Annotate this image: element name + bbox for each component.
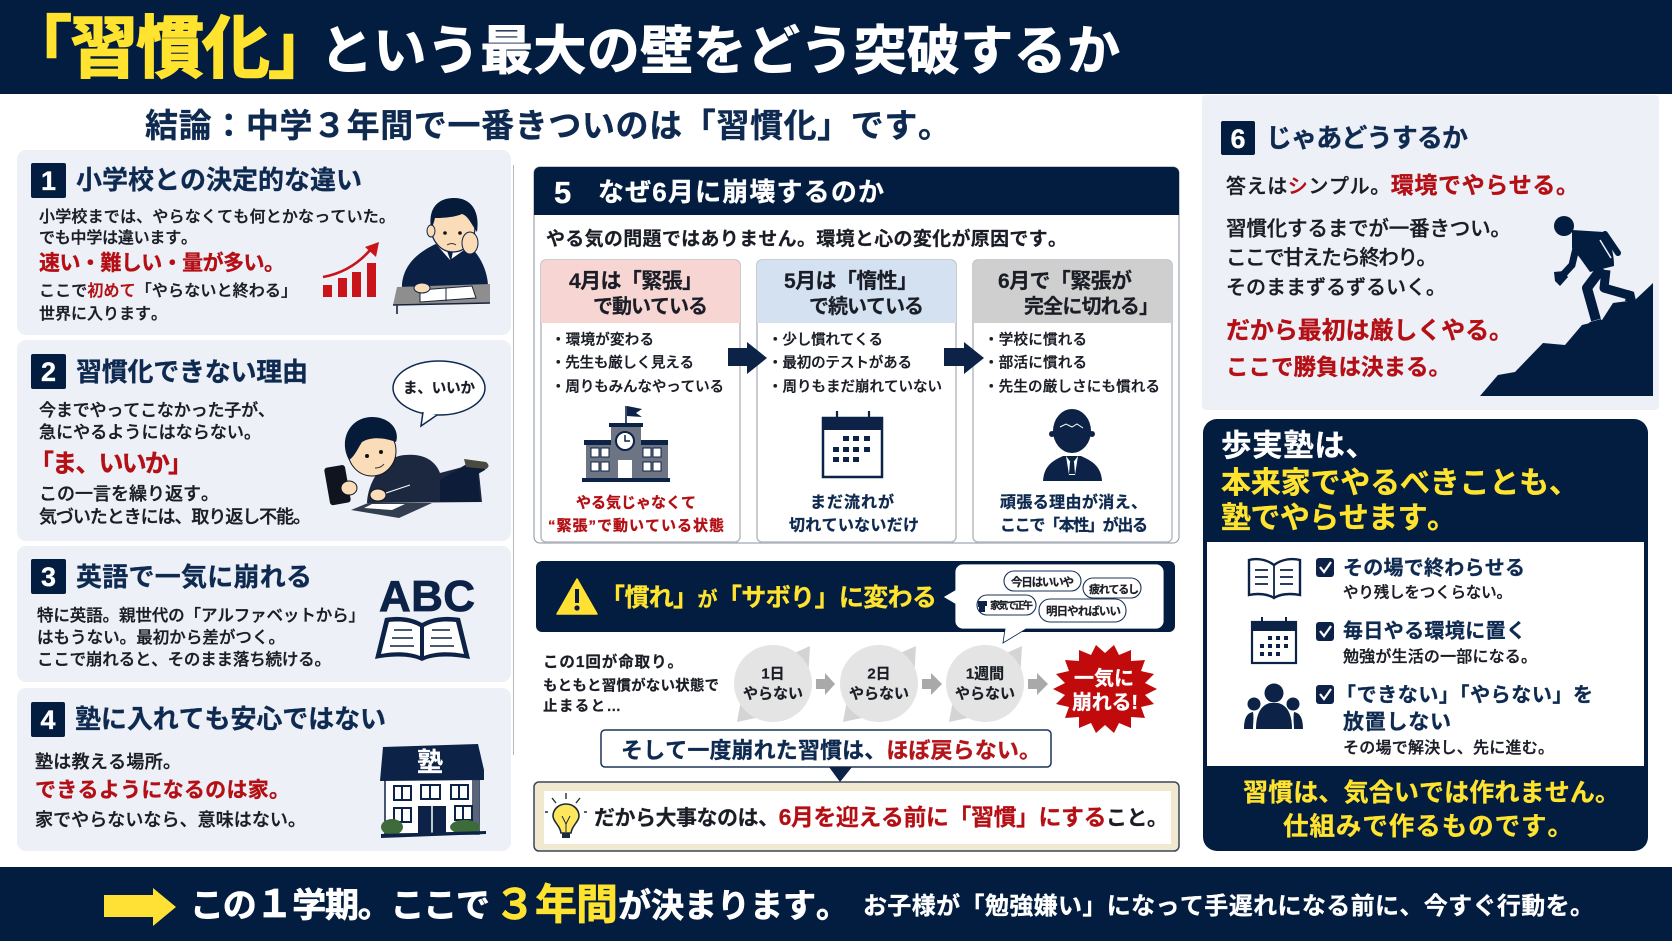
text block 6: 習慣化するまでが一番きつい。 xyxy=(1226,218,1511,240)
burst: collapse at once: 崩れる! xyxy=(1072,691,1138,714)
column: June switch off: 頑張る理由が消え、 xyxy=(1000,492,1147,512)
icon: juku building: 塾 xyxy=(417,747,443,777)
column: April tension xyxy=(541,260,740,542)
checkbox xyxy=(1316,622,1334,641)
row: don't leave unresolved: その場で解決し、先に進む。 xyxy=(1343,739,1554,757)
solution headline xyxy=(1221,429,1579,535)
row: finish on the spot: やり残しをつくらない。 xyxy=(1343,582,1512,602)
burst: collapse at once: 一気に xyxy=(1074,667,1134,690)
badge 3 xyxy=(31,559,66,594)
step: 1 week: やらない xyxy=(955,686,1015,702)
burst: collapse at once xyxy=(1053,645,1157,733)
icon: warning triangle xyxy=(557,579,597,614)
text block 1: 世界に入ります。 xyxy=(39,305,167,323)
closing message: 仕組みで作るものです。 xyxy=(1283,813,1573,841)
text: this one time is fatal: 止まると… xyxy=(543,698,621,715)
heading 4: 塾に入れても安心ではない xyxy=(75,704,386,734)
callout: once broken hardly returns xyxy=(601,730,1051,767)
footer banner xyxy=(0,867,1672,941)
title banner: という最大の壁をどう突破するか xyxy=(320,22,1120,81)
column: June switch off: ・先生の厳しさにも慣れる xyxy=(984,378,1160,396)
badge 4 xyxy=(31,702,65,737)
speech bubble: ma iika: ま、いいか xyxy=(403,380,476,397)
callout: make it a habit before June: だから大事なのは、6月を迎える前に「習慣」にすること。 xyxy=(594,804,1168,830)
arrow: May to June xyxy=(944,342,984,374)
panel 5 lead text: やる気の問題ではありません。環境と心の変化が原因です。 xyxy=(546,227,1067,250)
text: this one time is fatal xyxy=(543,652,719,715)
column: May inertia: ・最初のテストがある xyxy=(768,354,912,372)
checkbox xyxy=(1316,685,1334,704)
badge 6: 6 xyxy=(1230,124,1246,154)
badge 3: 3 xyxy=(41,562,56,592)
row: daily environment: 毎日やる環境に置く xyxy=(1343,620,1526,642)
column: May inertia: 5月は「惰性」 xyxy=(784,269,918,293)
solution headline: 本来家でやるべきことも、 xyxy=(1221,467,1579,500)
text block 2: 気づいたときには、取り返し不能。 xyxy=(39,507,311,527)
text block 6: ここで甘えたら終わり。 xyxy=(1226,246,1437,270)
thought bubble: excuses: 疲れてるし xyxy=(1089,582,1139,596)
text: this one time is fatal: この1回が命取り。 xyxy=(543,652,683,671)
row: daily environment: 勉強が生活の一部になる。 xyxy=(1343,647,1537,666)
column: April tension: ・環境が変わる xyxy=(551,330,654,348)
text block 6: だから最初は厳しくやる。 xyxy=(1226,318,1513,344)
illustration: climber on mountain xyxy=(1480,216,1653,396)
step: 2 days: やらない xyxy=(849,686,909,702)
row: finish on the spot: その場で終わらせる xyxy=(1343,556,1525,580)
row: don't leave unresolved: 放置しない xyxy=(1343,711,1451,734)
thought bubble: excuses: 家気で正午 xyxy=(990,599,1033,612)
column: June switch off: 6月で「緊張が xyxy=(998,269,1132,293)
icon: school xyxy=(582,406,670,482)
text block 1 xyxy=(39,208,395,323)
icon: book xyxy=(1249,559,1300,598)
text block 1: 小学校までは、やらなくても何とかなっていた。 xyxy=(39,208,395,226)
solution headline: 歩実塾は、 xyxy=(1221,429,1376,463)
text block 2: 「ま、いいか」 xyxy=(29,450,193,478)
title banner xyxy=(0,0,1672,94)
thought bubble: excuses: 今日はいいや xyxy=(1011,575,1074,589)
text block 3: ここで崩れると、そのまま落ち続ける。 xyxy=(37,650,331,669)
column: April tension: ・先生も厳しく見える xyxy=(551,354,694,372)
arrow xyxy=(1028,673,1048,695)
column: April tension: やる気じゃなくて xyxy=(576,494,696,512)
text block 2: この一言を繰り返す。 xyxy=(39,484,219,504)
heading 1: 小学校との決定的な違い xyxy=(76,165,362,195)
text block 4 xyxy=(35,752,306,830)
heading 3: 英語で一気に崩れる xyxy=(76,562,312,592)
warning band: familiarity becomes slacking xyxy=(536,561,1175,643)
panel 1: difference from elementary school xyxy=(17,150,511,335)
closing message xyxy=(1243,779,1620,841)
arrow xyxy=(816,673,835,695)
badge 2: 2 xyxy=(41,357,56,387)
icon: ABC open book xyxy=(375,572,475,661)
column: April tension: “緊張”で動いている状態 xyxy=(548,516,724,534)
badge 6 xyxy=(1221,121,1255,155)
icon: juku building xyxy=(380,744,486,838)
text block 1: ここで初めて「やらないと終わる」 xyxy=(39,282,297,300)
arrow: yellow xyxy=(104,888,176,926)
text block 4: 家でやらないなら、意味はない。 xyxy=(35,810,306,830)
text block 2: 急にやるようにはならない。 xyxy=(39,423,261,442)
text block 1: でも中学は違います。 xyxy=(39,229,197,247)
step: 2 days xyxy=(840,645,918,722)
panel 4: juku not enough xyxy=(17,688,511,851)
footer main message: この１学期。ここで xyxy=(190,884,490,926)
step: 1 day: 1日 xyxy=(761,666,785,682)
text block 2 xyxy=(29,400,311,527)
column: April tension: 4月は「緊張」 xyxy=(569,270,703,293)
text: this one time is fatal: もともと習慣がない状態で xyxy=(543,676,719,694)
checkbox xyxy=(1316,558,1334,577)
column: April tension: ・周りもみんなやっている xyxy=(551,378,724,396)
conclusion heading: 結論：中学３年間で一番きついのは「習慣化」です。 xyxy=(145,107,951,144)
text block 3: 特に英語。親世代の「アルファベットから」 xyxy=(37,606,365,625)
step: 1 day xyxy=(734,645,812,722)
footer banner: が決まります。 xyxy=(618,887,849,924)
column: June switch off: ・学校に慣れる xyxy=(984,330,1087,348)
text block 6: ここで勝負は決まる。 xyxy=(1226,355,1451,380)
icon: calendar small xyxy=(1252,617,1296,663)
panel 5 header xyxy=(534,167,1179,215)
solution headline: 塾でやらせます。 xyxy=(1221,502,1457,535)
column: May inertia xyxy=(757,260,956,542)
text block 6: そのままずるずるいく。 xyxy=(1226,276,1446,299)
column: May inertia: 切れていないだけ xyxy=(789,516,919,534)
icon: rising bar chart xyxy=(323,242,379,297)
heading 6: じゃあどうするか xyxy=(1266,123,1468,153)
icon: person silhouette xyxy=(1043,409,1102,481)
panel 5: why collapse in June xyxy=(534,167,1179,543)
title banner: 「習慣化」 xyxy=(4,11,336,87)
step: 1 week xyxy=(946,645,1024,722)
panel 3: English collapse xyxy=(17,546,511,682)
panel 6: what to do xyxy=(1202,95,1659,410)
column: May inertia: まだ流れが xyxy=(810,492,894,512)
icon: ABC open book: ABC xyxy=(379,572,475,621)
arrow: down triangle xyxy=(829,767,852,782)
badge 2 xyxy=(31,354,66,389)
column: June switch off: ・部活に慣れる xyxy=(984,354,1087,372)
badge 1 xyxy=(31,163,66,198)
panel 5 header: なぜ6月に崩壊するのか xyxy=(598,177,884,207)
arrow: April to May xyxy=(728,342,767,374)
panel 2: why habit fails xyxy=(17,340,511,541)
icon: calendar xyxy=(823,411,882,477)
callout: make it a habit before June xyxy=(534,782,1179,851)
closing message: 習慣は、気合いでは作れません。 xyxy=(1243,779,1620,807)
column: June switch off: ここで「本性」が出る xyxy=(1000,516,1148,534)
warning band: familiarity becomes slacking: 「慣れ」が「サボり」に変わる xyxy=(600,584,937,612)
footer sub message: お子様が「勉強嫌い」になって手遅れになる前に、今すぐ行動を。 xyxy=(863,892,1594,920)
step: 1 week: 1週間 xyxy=(966,666,1004,682)
step: 2 days: 2日 xyxy=(867,666,891,682)
panel: Ayumi juku solution xyxy=(1203,419,1648,851)
callout: once broken hardly returns: そして一度崩れた習慣は、ほぼ戻らない。 xyxy=(621,738,1041,763)
panel 5 header: 5 xyxy=(554,175,571,210)
text block 6: 答えはシンプル。環境でやらせる。 xyxy=(1226,172,1579,198)
flow: days of not doing xyxy=(734,645,1157,733)
icon: light bulb xyxy=(545,793,587,838)
text block 4: 塾は教える場所。 xyxy=(35,752,181,772)
text block 3: はもうない。最初から差がつく。 xyxy=(37,627,285,647)
badge 4: 4 xyxy=(40,705,56,735)
badge 1: 1 xyxy=(41,166,56,196)
row: don't leave unresolved xyxy=(1244,684,1593,757)
column: June switch off xyxy=(973,260,1172,542)
heading 2: 習慣化できない理由 xyxy=(76,357,308,387)
row: don't leave unresolved: 「できない」「やらない」を xyxy=(1336,684,1593,706)
row: daily environment xyxy=(1252,617,1537,666)
text block 2: 今までやってこなかった子が、 xyxy=(39,400,275,420)
text block 4: できるようになるのは家。 xyxy=(35,779,290,802)
thought bubble: excuses xyxy=(943,564,1164,643)
column: June switch off: 完全に切れる」 xyxy=(1024,295,1159,318)
illustration: student studying xyxy=(393,198,490,314)
thought bubble: excuses: 明日やればいい xyxy=(1046,604,1121,618)
column: May inertia: ・少し慣れてくる xyxy=(768,330,883,348)
text block 3 xyxy=(37,606,365,669)
white checklist area xyxy=(1207,542,1644,766)
column: May inertia: で続いている xyxy=(809,295,924,318)
illustration: student lying with phone xyxy=(324,417,488,518)
speech bubble: ma iika xyxy=(393,361,485,426)
footer banner: ３年間 xyxy=(494,881,618,928)
step: 1 day: やらない xyxy=(743,686,803,702)
arrow xyxy=(922,673,942,695)
column: April tension: で動いている xyxy=(593,295,708,318)
text block 6 xyxy=(1226,172,1579,380)
column: May inertia: ・周りもまだ崩れていない xyxy=(768,378,942,396)
row: finish on the spot xyxy=(1249,556,1525,602)
text block 1: 速い・難しい・量が多い。 xyxy=(39,251,285,275)
icon: people xyxy=(1244,684,1303,729)
